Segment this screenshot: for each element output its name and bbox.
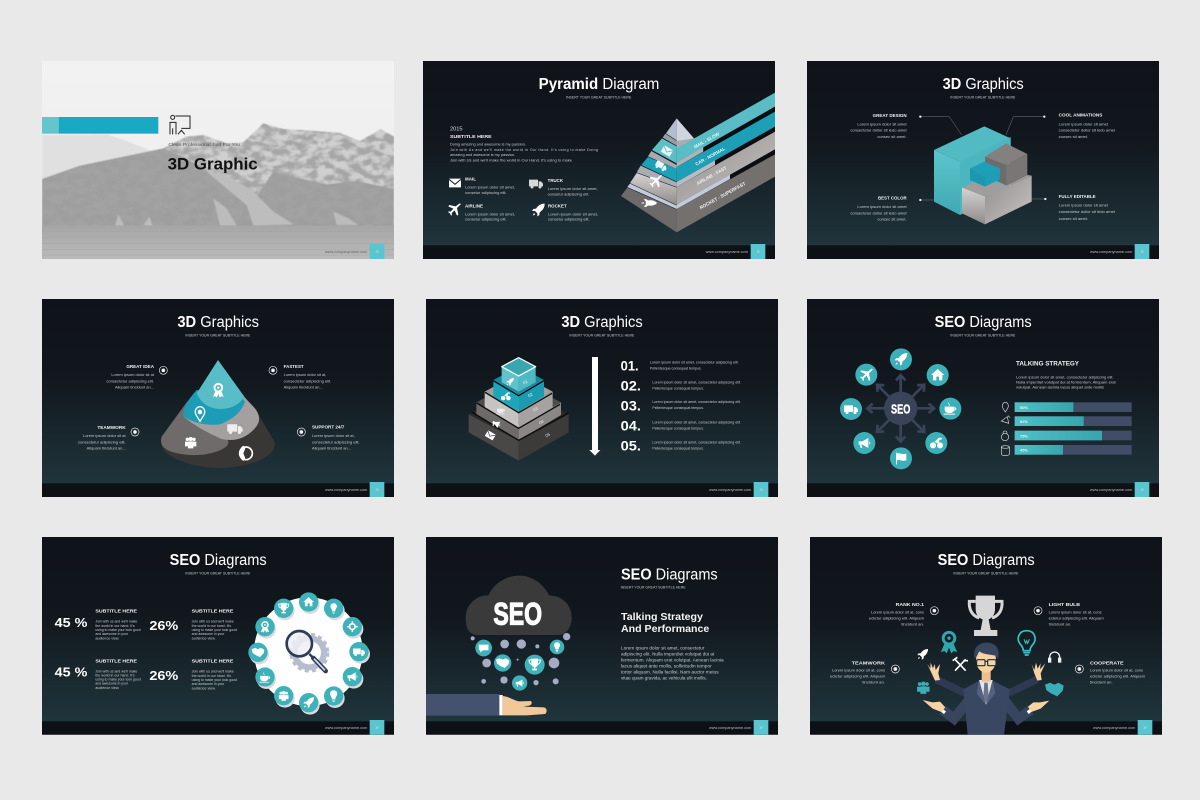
step 05: Pellentesque consequat tempus. (652, 447, 704, 451)
step 03: Pellentesque consequat tempus. (652, 406, 704, 410)
panel: SEO Diagrams businessman slide (810, 537, 1162, 735)
callout: light bulb (1034, 602, 1104, 627)
footer url and page number: www.companyname.com (1090, 250, 1133, 254)
footer url and page number: www.companyname.com (325, 726, 368, 730)
intro text block: Join with Us and we'll make the world in Our Hand. It's using to make (450, 158, 572, 162)
callout: great idea (106, 364, 167, 390)
legend: airline: consetur adipiscing elit. (465, 218, 507, 222)
pyramid diagram: MAIL - SLOW (693, 131, 721, 149)
photo: grey mountain landscape (42, 123, 394, 259)
icon: grey trophy (969, 596, 1002, 636)
footer url and page number (1090, 482, 1149, 497)
callout: cooperate: tincidunt an. (1090, 681, 1113, 685)
stat 26 percent, upper (149, 609, 237, 640)
callout: fully editable: consec sit amet. (1059, 217, 1088, 221)
icon: teal ribbon (941, 632, 957, 653)
step 01: Pellentesque consequat tempus. (650, 366, 702, 370)
stat 26 percent, lower: and awesome in your (192, 682, 225, 686)
title: Pyramid Diagram (539, 76, 659, 93)
callout: fully editable: consectetur dollor sit ledo amet (1059, 210, 1115, 214)
pyramid diagram: CAR - NORMAL (694, 146, 726, 167)
callout: light bulb: Lorem ipsum dolor sit at, cons (1049, 610, 1102, 614)
intro text block: amazing and awesome is my passion. (450, 153, 515, 157)
callout: teamwork: TEAMWORK (97, 425, 127, 430)
callout: support 24/7: consectetur adipiscing elit. (312, 440, 360, 444)
callout: support 24/7: Lorem ipsum dolor sit at, (312, 434, 355, 438)
progress bar chart: 75% (1020, 433, 1028, 438)
footer url and page number: www.companyname.com (1093, 726, 1136, 730)
stepped pyramid: 05 (544, 431, 551, 438)
stat 26 percent, lower: SUBTITLE HERE (192, 659, 233, 664)
callout: great idea: consectetur adipiscing elit. (106, 379, 154, 383)
heading: talking strategy: And Performance (621, 624, 710, 635)
footer url and page number: 16 (760, 725, 763, 729)
footer url and page number (1093, 720, 1152, 735)
callout: support 24/7: Aliquam tincidunt an... (312, 447, 351, 451)
callout: great idea: Lorem ipsum dolor sit at (111, 373, 154, 377)
callout: teamwork: Aliquam tincidunt an... (87, 447, 126, 451)
footer url and page number: www.companyname.com (1090, 488, 1133, 492)
callout: light bulb: LIGHT BULB (1049, 602, 1080, 607)
panel: 3D Graphics cube slide (807, 61, 1159, 259)
stepped pyramid (469, 358, 569, 461)
callout: cool animations: COOL ANIMATIONS (1059, 113, 1102, 118)
footer url and page number (706, 244, 765, 259)
legend: rocket: ROCKET (548, 204, 567, 209)
body paragraph: tortor aliquam. Nulla facilisi. Nam auctor metus (621, 669, 719, 674)
leader lines (919, 115, 1046, 201)
footer url and page number (325, 244, 384, 259)
panel: 3D Graphics stepped pyramid slide (426, 299, 778, 497)
stat 45 percent, upper: audience view. (95, 636, 119, 640)
text block: talking strategy: volutpat. Aenean lacinia lacus aliquet ante mollis (1016, 385, 1104, 389)
SEO cloud: SEO (493, 596, 542, 631)
callout: light bulb: tincidunt an. (1049, 623, 1071, 627)
icon: headphones (1049, 652, 1061, 662)
callout: rank no.1: ectetur adipiscing elit. Aliquam (869, 616, 924, 620)
stat 26 percent, lower: using to make your look good (192, 678, 237, 682)
step 04: 04. (621, 419, 641, 434)
intro text block: SUBTITLE HERE (450, 134, 492, 139)
callout: great design (850, 113, 907, 139)
icon wheel with magnifier (248, 592, 370, 715)
intro text block: Doing amazing and awesome is my passion. (450, 143, 526, 147)
progress bar chart: 45% (1020, 448, 1028, 453)
callout: fastest: Aliquam tincidunt an... (284, 386, 323, 390)
arrow: downward sequence (589, 357, 600, 456)
footer url and page number (709, 482, 768, 497)
cover tagline: Clean Professional Just For You (168, 142, 240, 148)
footer url and page number: 16 (1144, 725, 1147, 729)
icon: tools (953, 657, 968, 671)
stat 26 percent, upper: SUBTITLE HERE (192, 609, 233, 614)
panel: SEO Diagrams wheel slide (42, 537, 394, 735)
footer url and page number: 16 (760, 488, 763, 492)
step 01: 01. (621, 358, 639, 373)
pyramid diagram (621, 93, 775, 232)
callout: great design: GREAT DESIGN (873, 113, 907, 118)
stat 26 percent, lower: Join with us and we'll make (192, 670, 234, 674)
progress bar chart: 62% (1020, 419, 1028, 424)
stat 26 percent, upper: audience view. (192, 636, 216, 640)
stat 45 percent, upper: 45 % (55, 616, 87, 630)
progress bar chart: 50% (1020, 405, 1028, 410)
legend: mail: consetur adipiscing elit. (465, 191, 507, 195)
pyramid diagram: AIRLINE - FAST (696, 165, 728, 186)
callout: best color: Lorem ipsum dolor sit amet (857, 205, 907, 209)
intro text block: 2015 (450, 126, 463, 132)
title: SEO Diagrams (621, 567, 718, 584)
panel: SEO Diagrams cloud slide (426, 537, 778, 735)
cover title: 3D Graphic (168, 155, 258, 174)
legend: airline: AIRLINE (465, 203, 483, 208)
legend: airline: Lorem ipsum dolor sit amet, (465, 212, 515, 216)
callout: great idea: GREAT IDEA (126, 364, 155, 369)
callout: best color: consec sit amet. (877, 218, 907, 222)
stat 26 percent, upper: the world in our hand. It's (192, 624, 231, 628)
step 03 (621, 398, 741, 413)
callout: fastest: Lorem ipsum dolor sit at, (284, 373, 326, 377)
legend: truck: TRUCK (548, 178, 564, 183)
body paragraph (621, 645, 724, 680)
teal title bar (42, 117, 158, 134)
callout: fastest (269, 364, 331, 390)
footer url and page number: 16 (757, 250, 760, 254)
body paragraph: fermentum. Aliquam erat volutpat. Aenean lacinia (621, 657, 724, 662)
callout: teamwork: TEAMWORK (852, 660, 886, 665)
subtitle: INSERT YOUR GREAT SUBTITLE HERE (950, 333, 1015, 337)
title: SEO Diagrams (938, 552, 1035, 569)
title: 3D Graphics (177, 314, 259, 331)
icon: team people (917, 681, 930, 694)
stat 45 percent, lower: the world in our hand. It's (95, 674, 135, 678)
callout: teamwork: tincidunt an. (862, 681, 885, 685)
legend: rocket: consetur adipiscing elit. (548, 218, 590, 222)
stat 26 percent, upper: and awesome in your (192, 632, 225, 636)
stepped pyramid: 01 (522, 378, 529, 385)
step 03: Lorem ipsum dolor sit amet, consectetur adipiscing elit. (652, 400, 741, 404)
panel: 3D Graphics cone slide (42, 299, 394, 497)
footer url and page number: 16 (376, 725, 379, 729)
footer url and page number: 16 (376, 488, 379, 492)
legend: truck: Lorem ipsum dolor sit amet, (548, 187, 598, 191)
icon: rocket (917, 649, 928, 660)
step 04: Lorem ipsum dolor sit amet, consectetur adipiscing elit. (652, 421, 741, 425)
callout: cooperate: COOPERATE (1090, 660, 1124, 665)
progress bar chart (1001, 402, 1132, 455)
subtitle: INSERT YOUR GREAT SUBTITLE HERE (621, 586, 686, 590)
legend: mail: Lorem ipsum dolor sit amet, (465, 186, 515, 190)
3D cube stack (934, 126, 1032, 224)
icon: handshake (1045, 683, 1064, 696)
callout: teamwork (78, 425, 139, 451)
layered cone (161, 360, 275, 468)
heading: talking strategy: Talking Strategy (621, 612, 703, 623)
footer url and page number (325, 482, 384, 497)
stat 26 percent, lower: the world in our hand. It's (192, 674, 231, 678)
stat 45 percent, upper: using to make your look good (95, 628, 141, 632)
legend: truck (529, 178, 598, 196)
legend: truck: consetur adipiscing elit. (548, 192, 589, 196)
step 04: Pellentesque consequat tempus. (652, 427, 704, 431)
callout: fully editable (1059, 194, 1115, 221)
footer url and page number (1090, 244, 1149, 259)
callout: support 24/7 (297, 425, 360, 451)
heading: talking strategy (621, 612, 710, 635)
subtitle: INSERT YOUR GREAT SUBTITLE HERE (185, 571, 250, 575)
intro text block (450, 126, 598, 162)
callout: best color: consectetur dollor sit ledo amet (850, 211, 907, 215)
step 01 (621, 358, 739, 373)
step 02: Lorem ipsum dolor sit amet, consectetur adipiscing elit. (652, 380, 741, 384)
footer url and page number: www.companyname.com (325, 250, 368, 254)
callout: cool animations (1059, 113, 1115, 139)
step 03: 03. (621, 398, 641, 413)
stat 26 percent, lower (149, 659, 237, 690)
callout: rank no.1: Lorem ipsum dolor sit at, cons (871, 610, 924, 614)
hub and spoke diagram: SEO (891, 401, 910, 416)
subtitle: INSERT YOUR GREAT SUBTITLE HERE (566, 96, 631, 100)
stepped pyramid: 04 (538, 418, 545, 425)
footer url and page number (325, 720, 384, 735)
callout: light bulb: ectetur adipiscing elit. Aliquam (1049, 616, 1104, 620)
stat 45 percent, upper (55, 609, 141, 640)
text block: talking strategy: Lorem ipsum dolor sit amet, consectetur adipiscing elit. (1016, 375, 1114, 379)
stepped pyramid: 02 (527, 391, 534, 398)
text block: talking strategy: TALKING STRATEGY (1016, 362, 1079, 368)
stat 45 percent, upper: and awesome in your (95, 632, 129, 636)
step 05 (621, 439, 741, 454)
stat 26 percent, upper: Join with us and we'll make (192, 620, 234, 624)
hub and spoke diagram (840, 348, 961, 469)
callout: teamwork: consectetur adipiscing elit. (78, 440, 126, 444)
step 05: 05. (621, 439, 641, 454)
step 02: 02. (621, 378, 641, 393)
title: 3D Graphics (561, 314, 643, 331)
body paragraph: Lorem ipsum dolor sit amet, consectetur (621, 645, 705, 650)
callout: great design: consec sit amet. (877, 135, 907, 139)
callout: cool animations: Lorem ipsum dolor sit amet (1059, 122, 1108, 126)
legend: rocket (532, 204, 598, 222)
footer url and page number: 16 (1141, 488, 1144, 492)
footer url and page number: www.companyname.com (325, 488, 368, 492)
legend: mail: MAIL (465, 177, 476, 182)
icon: presenter at board (170, 115, 190, 134)
callout: fastest: FASTEST (284, 364, 304, 369)
title: SEO Diagrams (935, 314, 1032, 331)
stat 45 percent, lower (55, 658, 141, 690)
stat 45 percent, upper: SUBTITLE HERE (95, 609, 137, 614)
body paragraph: adipiscing elit. Nulla imperdiet volutpat dui at (621, 651, 715, 656)
callout: fastest: consectetur adipiscing elit. (284, 379, 331, 383)
stat 26 percent, upper: 26% (149, 619, 178, 633)
step 01: Lorem ipsum dolor sit amet, consectetur adipiscing elit. (650, 360, 739, 364)
stat 45 percent, lower: 45 % (55, 666, 87, 680)
callout: fully editable: Lorem ipsum dolor sit amet (1059, 204, 1108, 208)
subtitle: INSERT YOUR GREAT SUBTITLE HERE (953, 571, 1018, 575)
callout: cooperate (1075, 660, 1145, 685)
callout: rank no.1: tincidunt an. (901, 623, 924, 627)
callout: teamwork: Lorem ipsum dolor sit at, cons (832, 668, 885, 672)
stat 45 percent, lower: audience view. (95, 686, 119, 690)
step 04 (621, 419, 741, 434)
subtitle: INSERT YOUR GREAT SUBTITLE HERE (950, 96, 1015, 100)
footer url and page number: www.companyname.com (709, 488, 752, 492)
step 02 (621, 378, 741, 393)
stat 26 percent, lower: audience view. (192, 686, 216, 690)
callout: best color (850, 195, 908, 222)
stepped pyramid: 03 (532, 406, 539, 413)
legend: airline (448, 203, 515, 222)
callout: great idea: Aliquam tincidunt an... (115, 386, 154, 390)
callout: rank no.1: RANK NO.1 (896, 602, 925, 607)
callout: cooperate: Lorem ipsum dolor sit at, cons (1090, 668, 1143, 672)
stat 45 percent, lower: SUBTITLE HERE (95, 658, 137, 663)
footer url and page number (709, 720, 768, 735)
title: 3D Graphics (943, 76, 1024, 93)
SEO cloud (466, 576, 572, 635)
step 02: Pellentesque consequat tempus. (652, 386, 704, 390)
body paragraph: vitae quam gravida, ac vehicula elit mollis. (621, 675, 707, 680)
stat 26 percent, upper: using to make your look good (192, 628, 237, 632)
callout: great design: consectetur dollor sit ledo amet (850, 129, 907, 133)
stat 45 percent, lower: Join with us and we'll make (95, 669, 137, 673)
footer url and page number: www.companyname.com (709, 726, 752, 730)
callout: rank no.1 (869, 602, 938, 627)
callout: best color: BEST COLOR (878, 195, 908, 200)
callout: cool animations: consectetur dollor sit ledo amet (1059, 129, 1115, 133)
footer url and page number: www.companyname.com (706, 250, 748, 254)
panel: cover slide, 3D Graphic (42, 61, 394, 259)
intro text block: Join with Us and we'll make the world in Our Hand. It's using to make Doing (450, 148, 598, 152)
callout: teamwork (830, 660, 899, 685)
stat 45 percent, lower: and awesome in your (95, 682, 129, 686)
footer url and page number: 16 (376, 250, 379, 254)
stat 45 percent, upper: Join with us and we'll make (95, 620, 137, 624)
legend: mail (449, 177, 515, 195)
callout: cooperate: ectetur adipiscing elit. Aliquam (1090, 674, 1145, 678)
callout: cool animations: consec sit amet. (1059, 135, 1088, 139)
callout: great design: Lorem ipsum dolor sit amet (857, 122, 907, 126)
icon: light bulb outline (1018, 631, 1035, 655)
pyramid diagram: ROCKET - SUPERFAST (699, 181, 747, 210)
stat 45 percent, upper: the world in our hand. It's (95, 624, 135, 628)
text block: talking strategy: Nulla imperdiet volutpat dui at fermentum. Aliquam erat (1016, 380, 1116, 384)
title: SEO Diagrams (170, 552, 267, 569)
callout: support 24/7: SUPPORT 24/7 (312, 425, 345, 430)
stat 45 percent, lower: using to make your look good (95, 678, 141, 682)
footer url and page number: 16 (1141, 250, 1144, 254)
callout: teamwork: ectetur adipiscing elit. Aliquam (830, 674, 885, 678)
stat 26 percent, lower: 26% (149, 669, 178, 683)
body paragraph: lacus aliquet ante mollis, sollicitudin tempor (621, 663, 712, 668)
callout: fully editable: FULLY EDITABLE (1059, 194, 1096, 199)
hand with sleeve (426, 694, 547, 716)
text block: talking strategy (1016, 362, 1116, 389)
callout: teamwork: Lorem ipsum dolor sit at (83, 434, 126, 438)
panel: SEO Diagrams hub slide (807, 299, 1159, 497)
panel: Pyramid Diagram slide (423, 61, 775, 259)
subtitle: INSERT YOUR GREAT SUBTITLE HERE (569, 333, 634, 337)
businessman illustration (923, 643, 1049, 735)
falling icon bubbles (471, 633, 570, 691)
step 05: Lorem ipsum dolor sit amet, consectetur adipiscing elit. (652, 441, 741, 445)
legend: rocket: Lorem ipsum dolor sit amet, (548, 212, 598, 216)
subtitle: INSERT YOUR GREAT SUBTITLE HERE (185, 333, 250, 337)
